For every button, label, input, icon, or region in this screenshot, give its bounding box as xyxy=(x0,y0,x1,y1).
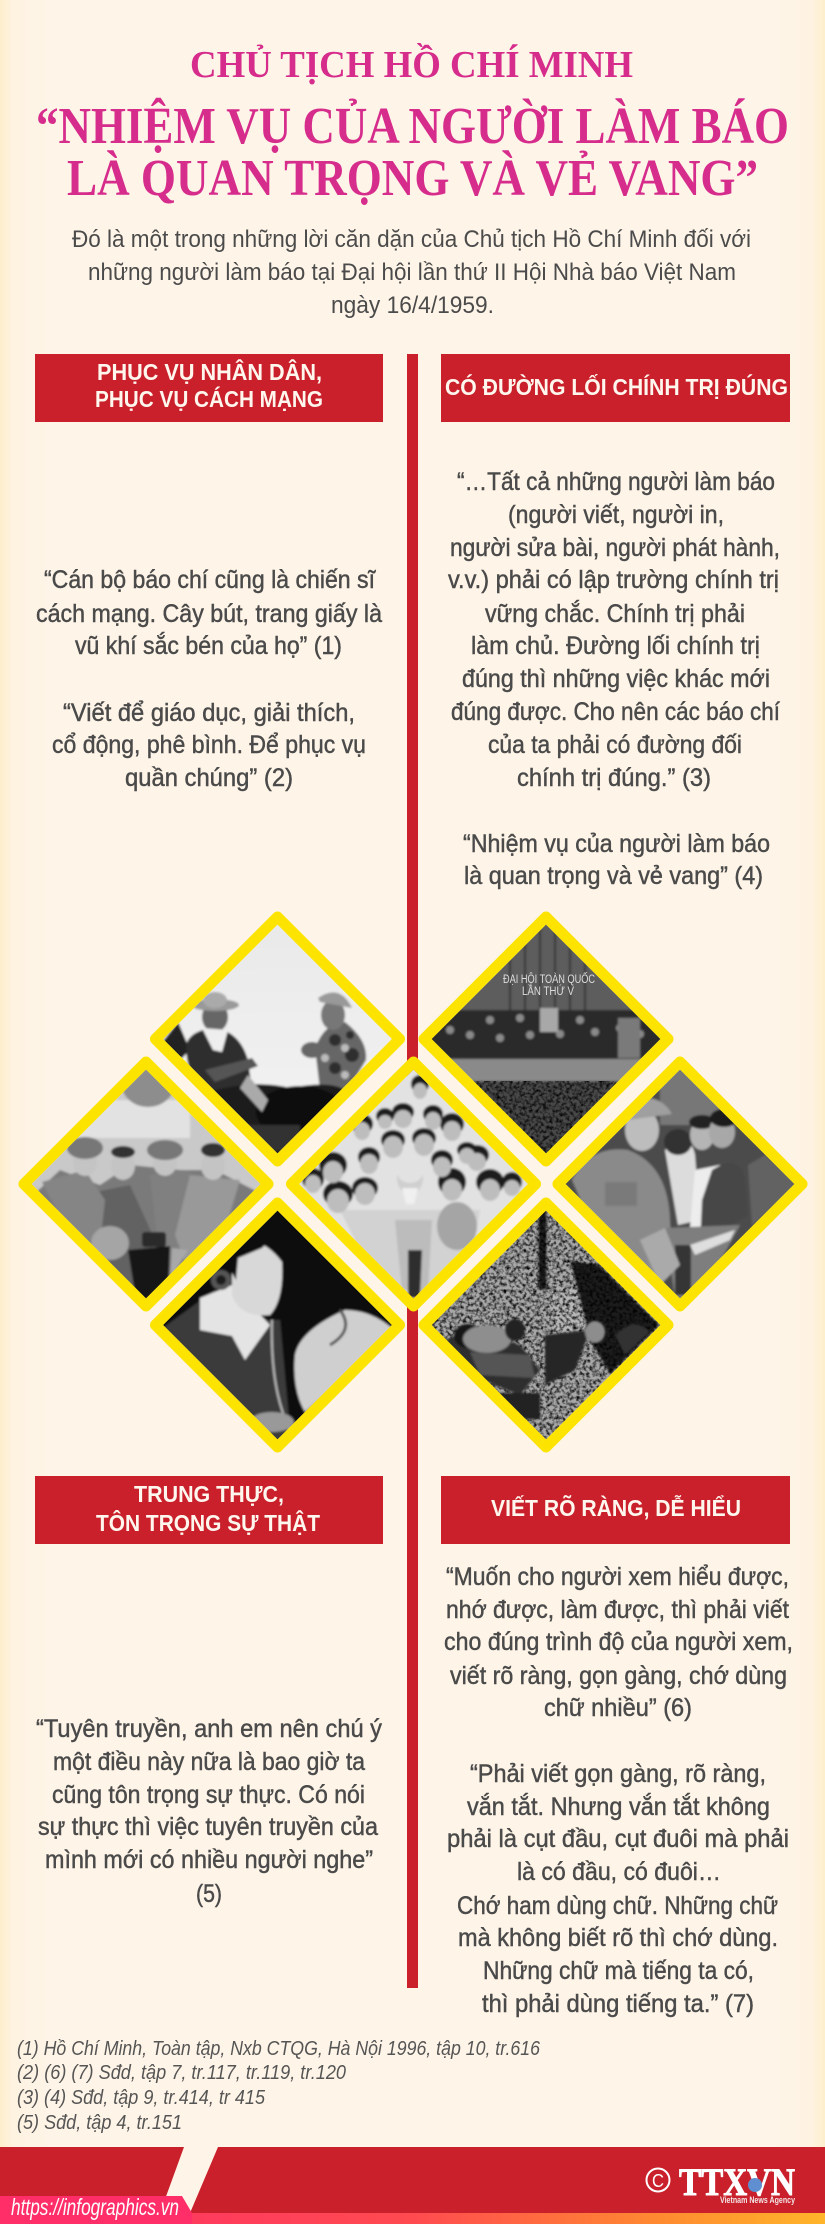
panel: có đường lối chính trị đúng xyxy=(441,354,790,890)
logo: TTXVN: TTXVN xyxy=(679,2161,795,2204)
quotes 3 and 4: làm chủ. Đường lối chính trị xyxy=(471,632,760,660)
quotes 1 and 2: “Cán bộ báo chí cũng là chiến sĩ xyxy=(44,566,376,594)
logo: TTXVN xyxy=(646,2161,795,2205)
quotes 1 and 2: cách mạng. Cây bút, trang giấy là xyxy=(36,600,382,628)
intro text: ngày 16/4/1959. xyxy=(331,292,494,319)
footer band xyxy=(0,2147,825,2224)
quotes 6 and 7: là có đầu, có đuôi… xyxy=(517,1858,721,1886)
quotes 6 and 7: phải là cụt đầu, cụt đuôi mà phải xyxy=(447,1825,789,1853)
quote 5: (5) xyxy=(196,1880,222,1908)
central red divider xyxy=(407,354,418,1988)
quotes 3 and 4: vững chắc. Chính trị phải xyxy=(485,599,745,628)
photo: national congress hall xyxy=(428,920,664,1161)
heading: trung thực: TRUNG THỰC, xyxy=(134,1481,284,1507)
photo: reporters interviewing xyxy=(562,1065,798,1303)
banner text in photo xyxy=(503,972,595,995)
quote 5: “Tuyên truyền, anh em nên chú ý xyxy=(36,1715,382,1743)
quotes 3 and 4 xyxy=(448,468,780,890)
quotes 3 and 4: (người viết, người in, xyxy=(508,501,724,529)
footnotes xyxy=(17,2037,541,2134)
quotes 1 and 2: cổ động, phê bình. Để phục vụ xyxy=(52,731,366,759)
quotes 3 and 4: người sửa bài, người phát hành, xyxy=(450,534,780,562)
heading: viết rõ ràng xyxy=(441,1476,790,1544)
heading: trung thực xyxy=(35,1476,383,1544)
quotes 6 and 7: viết rõ ràng, gọn gàng, chớ dùng xyxy=(450,1662,787,1690)
quote 5: một điều này nữa là bao giờ ta xyxy=(53,1748,365,1776)
heading: đường lối chính trị: CÓ ĐƯỜNG LỐI CHÍNH TRỊ ĐÚNG xyxy=(445,373,788,400)
panel: trung thực xyxy=(35,1476,383,1908)
quotes 1 and 2 xyxy=(36,566,382,792)
banner text in photo: LẦN THỨ V xyxy=(522,985,574,998)
photo: two soldiers talking xyxy=(160,920,396,1160)
quotes 3 and 4: v.v.) phải có lập trường chính trị xyxy=(448,566,779,594)
quotes 6 and 7: cho đúng trình độ của người xem, xyxy=(444,1628,793,1656)
quotes 1 and 2: “Viết để giáo dục, giải thích, xyxy=(63,699,355,727)
quotes 6 and 7: mà không biết rõ thì chớ dùng. xyxy=(458,1924,778,1952)
source url tab xyxy=(0,2194,192,2224)
quotes 6 and 7: nhớ được, làm được, thì phải viết xyxy=(446,1596,789,1624)
heading: phục vụ nhân dân: PHỤC VỤ CÁCH MẠNG xyxy=(95,385,323,412)
quotes 6 and 7: chữ nhiều” (6) xyxy=(544,1694,692,1722)
photo: soldiers in the jungle xyxy=(428,1206,664,1444)
title xyxy=(36,42,789,207)
heading: trung thực: TÔN TRỌNG SỰ THẬT xyxy=(96,1509,321,1536)
yellow diamond frames xyxy=(24,917,802,1447)
footnotes: (2) (6) (7) Sđd, tập 7, tr.117, tr.119, tr.120 xyxy=(17,2061,347,2084)
quotes 1 and 2: vũ khí sắc bén của họ” (1) xyxy=(75,631,342,660)
quotes 6 and 7: Chớ ham dùng chữ. Những chữ xyxy=(457,1892,778,1920)
quote 5: mình mới có nhiều người nghe” xyxy=(45,1846,373,1874)
footnotes: (1) Hồ Chí Minh, Toàn tập, Nxb CTQG, Hà Nội 1996, tập 10, tr.616 xyxy=(17,2037,541,2060)
quotes 3 and 4: “Nhiệm vụ của người làm báo xyxy=(463,830,770,858)
heading: phục vụ nhân dân: PHỤC VỤ NHÂN DÂN, xyxy=(97,358,322,385)
quotes 6 and 7: Những chữ mà tiếng ta có, xyxy=(483,1957,754,1985)
quote 5: cũng tôn trọng sự thực. Có nói xyxy=(52,1781,365,1809)
photo: President Hồ Chí Minh among journalists xyxy=(295,1065,531,1303)
quotes 6 and 7: “Muốn cho người xem hiểu được, xyxy=(446,1563,789,1591)
quote 5: sự thực thì việc tuyên truyền của xyxy=(38,1813,378,1841)
quotes 6 and 7: “Phải viết gọn gàng, rõ ràng, xyxy=(470,1760,766,1788)
quotes 3 and 4: “…Tất cả những người làm báo xyxy=(457,468,775,496)
heading: phục vụ nhân dân xyxy=(35,354,383,422)
quotes 3 and 4: chính trị đúng.” (3) xyxy=(517,764,711,792)
intro text: những người làm báo tại Đại hội lần thứ II Hội Nhà báo Việt Nam xyxy=(88,259,736,286)
title: CHỦ TỊCH HỒ CHÍ MINH xyxy=(190,42,633,86)
panel: phục vụ nhân dân xyxy=(35,354,383,792)
footnotes: (5) Sđd, tập 4, tr.151 xyxy=(17,2111,182,2134)
quotes 3 and 4: của ta phải có đường đối xyxy=(488,731,742,759)
quote 5 xyxy=(36,1715,382,1908)
quotes 3 and 4: đúng được. Cho nên các báo chí xyxy=(451,698,780,726)
banner text in photo: ĐẠI HỘI TOÀN QUỐC xyxy=(503,972,595,986)
photo: radio operator with headphones xyxy=(160,1206,396,1444)
quotes 3 and 4: là quan trọng và vẻ vang” (4) xyxy=(464,862,763,890)
intro text xyxy=(72,226,751,319)
panel: viết rõ ràng xyxy=(441,1476,793,2018)
logo: TTXVN: C xyxy=(652,2171,664,2191)
quotes 1 and 2: quần chúng” (2) xyxy=(125,764,293,792)
heading: viết rõ ràng: VIẾT RÕ RÀNG, DỄ HIỂU xyxy=(491,1493,741,1521)
photo collage xyxy=(24,917,802,1447)
footnotes: (3) (4) Sđd, tập 9, tr.414, tr 415 xyxy=(17,2086,266,2109)
intro text: Đó là một trong những lời căn dặn của Chủ tịch Hồ Chí Minh đối với xyxy=(72,226,751,253)
quotes 3 and 4: đúng thì những việc khác mới xyxy=(462,665,770,693)
photo: four war correspondents xyxy=(28,1063,264,1303)
logo: TTXVN: Vietnam News Agency xyxy=(720,2195,795,2205)
quotes 6 and 7: vắn tắt. Nhưng vắn tắt không xyxy=(467,1792,770,1821)
quotes 6 and 7 xyxy=(444,1563,793,2018)
quotes 6 and 7: thì phải dùng tiếng ta.” (7) xyxy=(482,1990,754,2018)
source url tab: https://infographics.vn xyxy=(11,2194,179,2220)
heading: đường lối chính trị xyxy=(441,354,790,422)
